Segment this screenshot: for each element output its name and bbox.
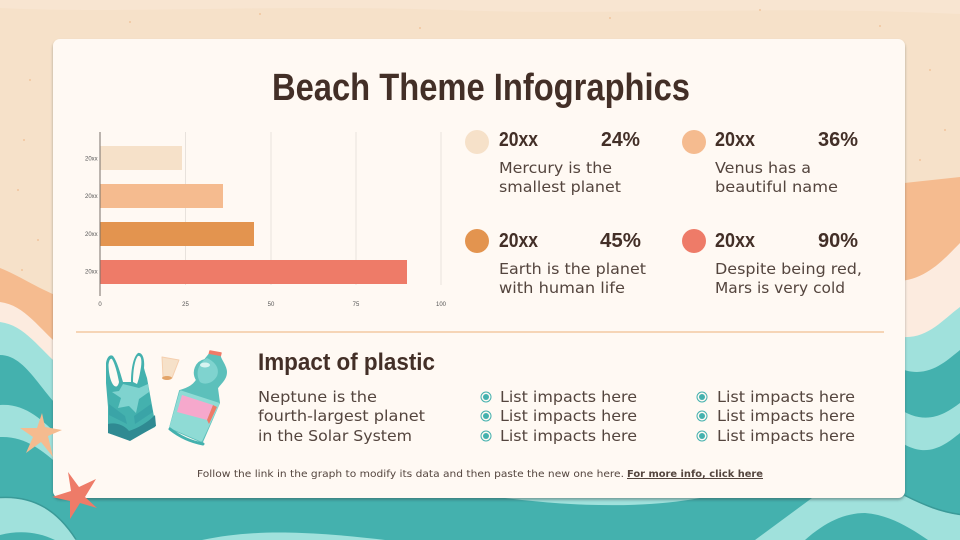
legend: Venus: [682, 129, 858, 196]
legend: Mars: [682, 229, 862, 297]
footer note: For more info, click here: [627, 469, 763, 480]
bar chart: 20xx: [85, 194, 98, 200]
legend: Mars: Mars is very cold: [715, 279, 845, 297]
legend: Mercury: [465, 129, 640, 196]
text block: Neptune description: fourth-largest planet: [258, 407, 425, 425]
legend: Venus: 36%: [818, 129, 858, 151]
icon: peach starfish: [20, 413, 62, 457]
text block: Neptune description: in the Solar System: [258, 427, 412, 445]
right bands: [895, 177, 960, 300]
icon: coral starfish: [52, 472, 97, 519]
list: impacts column 2: [697, 388, 855, 445]
list: impacts column 1: List impacts here: [500, 407, 637, 425]
icon: plastic cup: [162, 357, 179, 380]
bar chart: 20xx: [85, 232, 98, 238]
list: impacts column 1: List impacts here: [500, 427, 637, 445]
left bands: [0, 268, 60, 400]
bar chart: 50: [268, 302, 275, 308]
legend: Mercury: smallest planet: [499, 178, 621, 196]
legend: Mars: 20xx: [715, 230, 755, 252]
bar chart: 20xx: [85, 156, 98, 162]
list: impacts column 2: List impacts here: [717, 427, 855, 445]
title: Beach Theme Infographics: [272, 67, 690, 109]
legend: Venus: Venus has a: [715, 159, 811, 177]
bar chart: 100: [436, 302, 447, 308]
legend: Earth: with human life: [499, 279, 625, 297]
list: impacts column 1: List impacts here: [500, 388, 637, 406]
legend: Mercury: Mercury is the: [499, 159, 612, 177]
bar chart: 0: [98, 302, 102, 308]
bar chart: 20xx: [85, 270, 98, 276]
legend: Earth: [465, 229, 646, 297]
bar chart: [85, 132, 447, 308]
legend: Venus: 20xx: [715, 129, 755, 151]
list: impacts column 1: [481, 388, 637, 445]
bar chart: 75: [353, 302, 360, 308]
footer note: Follow the link in the graph to modify its data and then paste the new one here.: [197, 469, 624, 480]
icon: plastic bottle: [170, 351, 226, 444]
legend: Mercury: 20xx: [499, 129, 538, 151]
text block: Neptune description: [258, 388, 425, 445]
text block: Neptune description: Neptune is the: [258, 388, 377, 406]
legend: Mercury: 24%: [601, 129, 640, 151]
bottom waves: [505, 498, 700, 505]
legend: Mars: 90%: [818, 230, 858, 252]
legend: Venus: beautiful name: [715, 178, 838, 196]
legend: Earth: 20xx: [499, 230, 538, 252]
panel: main card: [53, 39, 905, 498]
legend: Earth: Earth is the planet: [499, 260, 646, 278]
list: impacts column 2: List impacts here: [717, 388, 855, 406]
legend: Earth: 45%: [600, 230, 641, 252]
heading: impact of plastic: Impact of plastic: [258, 349, 435, 376]
icon: swimsuit: [106, 353, 156, 441]
list: impacts column 2: List impacts here: [717, 407, 855, 425]
water base: [0, 498, 960, 540]
legend: Mars: Despite being red,: [715, 260, 862, 278]
bar chart: 25: [182, 302, 189, 308]
